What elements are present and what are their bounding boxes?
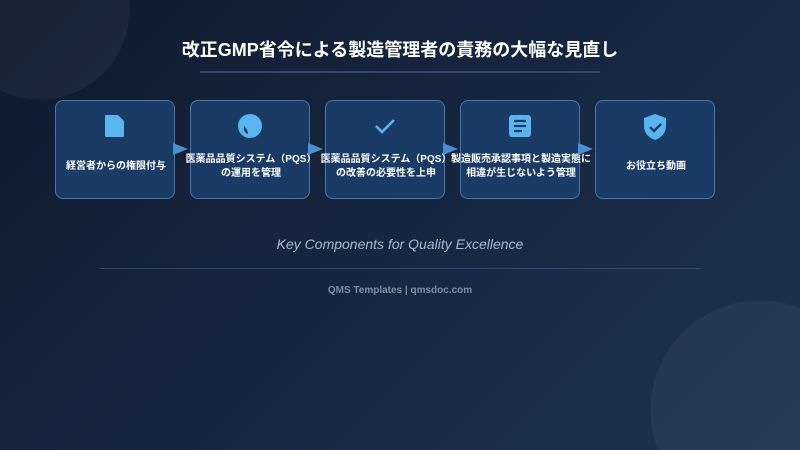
panel: step 1 — [55, 100, 175, 199]
icon: globe — [238, 114, 262, 138]
panel: step 5 — [595, 100, 715, 199]
arrow 4 — [578, 143, 593, 155]
text: step 3: の改善の必要性を上申 — [336, 168, 436, 179]
icon: check — [375, 119, 395, 134]
text: step 2: の運用を管理 — [221, 168, 281, 179]
icon: shield — [644, 114, 666, 140]
text: step 4 — [451, 153, 591, 179]
footer: QMS Templates | qmsdoc.com — [328, 285, 472, 296]
arrow 1 — [173, 143, 188, 155]
text: step 3 — [321, 153, 451, 179]
panel: step 2 — [190, 100, 310, 199]
panel: step 3 — [325, 100, 445, 199]
arrow 2 — [308, 143, 323, 155]
text: step 4: 製造販売承認事項と製造実態に — [451, 154, 591, 165]
title: 改正GMP省令による製造管理者の責務の大幅な見直し — [182, 40, 618, 60]
arrow 3 — [443, 143, 458, 155]
icon: document — [105, 115, 124, 137]
subtitle: Key Components for Quality Excellence — [277, 236, 523, 252]
text: step 2 — [186, 153, 316, 179]
text: step 2: 医薬品品質システム（PQS） — [186, 154, 316, 165]
text: step 5: お役立ち動画 — [626, 161, 686, 172]
text: step 3: 医薬品品質システム（PQS） — [321, 154, 451, 165]
text: step 1: 経営者からの権限付与 — [66, 161, 166, 172]
text: step 4: 相違が生じないよう管理 — [466, 168, 576, 179]
panel: step 4 — [460, 100, 580, 199]
icon: list document — [509, 115, 531, 137]
